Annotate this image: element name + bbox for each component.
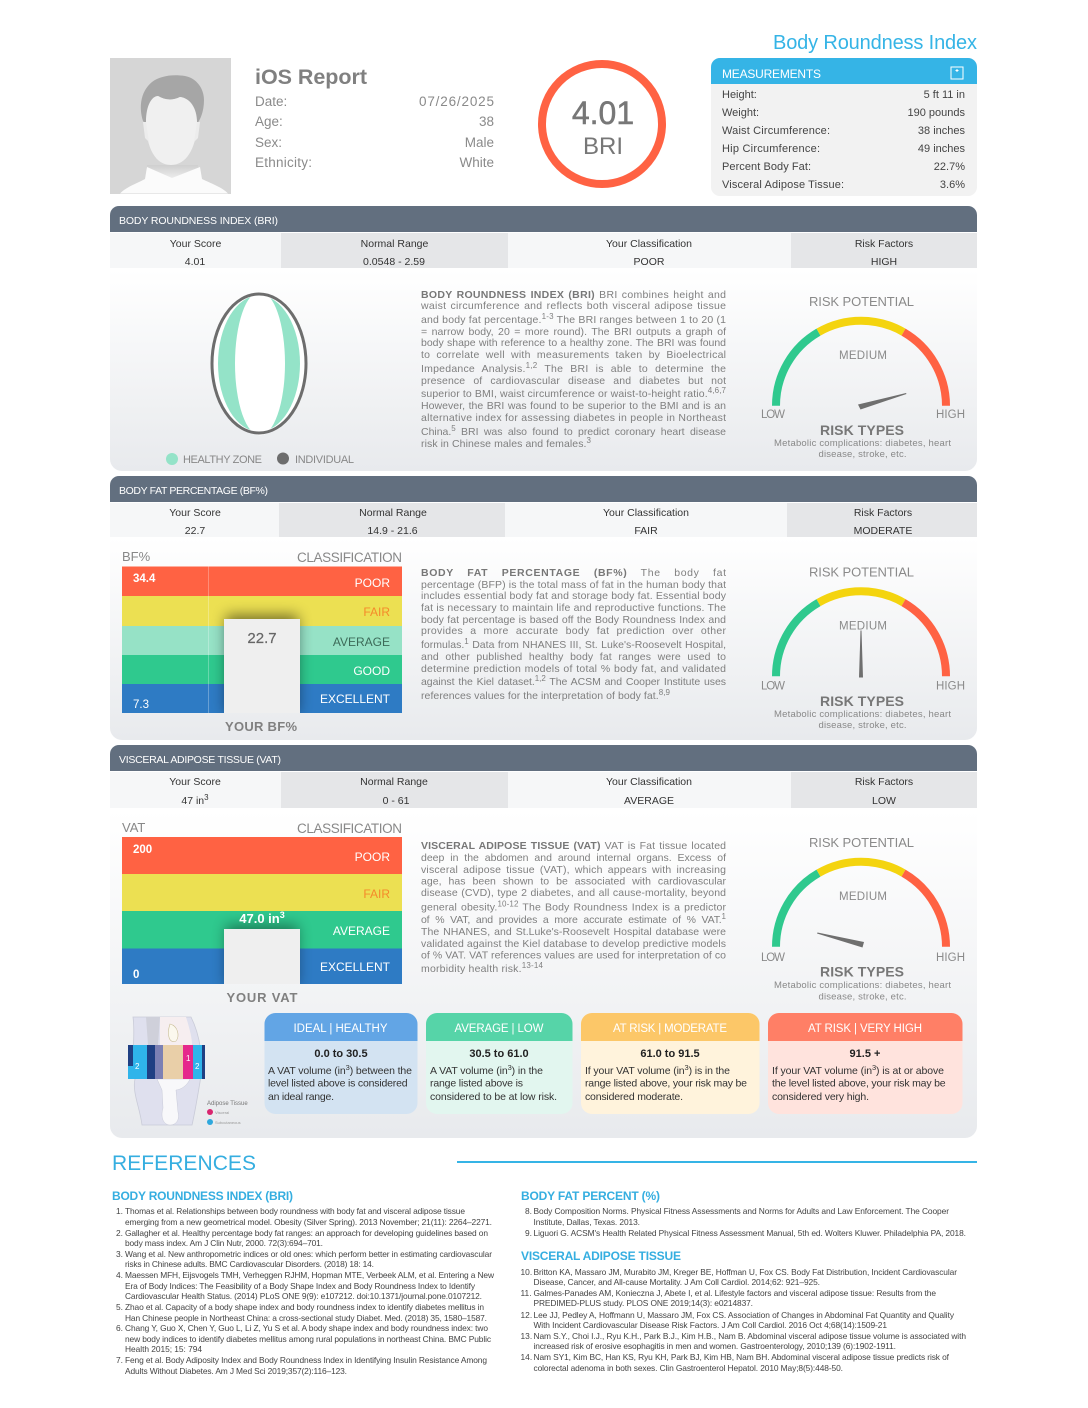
- chart: VAT classification bands: AVERAGE: [333, 924, 390, 938]
- chart: body fat classification bands: 7.3: [133, 699, 149, 711]
- chart: body fat classification bands: AVERAGE: [333, 635, 390, 649]
- card: at risk very high: 91.5 +: [850, 1048, 880, 1060]
- text: VAT description: [421, 840, 727, 975]
- panel: measurements: 49 inches: [918, 143, 965, 155]
- panel: measurements: Waist Circumference:: [722, 125, 830, 137]
- VAT score table: 3: [204, 793, 209, 802]
- card: ideal healthy: ) between the: [350, 1065, 412, 1077]
- text: BRI description: 1-3: [542, 312, 554, 321]
- text: BF description: percentage (BFP) is the total mass of fat in the human body that: [421, 579, 726, 591]
- BF score table: [110, 503, 977, 537]
- BRI score table: Your Score: [170, 238, 221, 250]
- references: body roundness index: new body indices to identify diabetes mellitus among rural populations in northeast China. BMC Public: [125, 1334, 491, 1344]
- card: at risk moderate: ) is in the: [689, 1065, 730, 1077]
- card: average low: 30.5 to 61.0: [469, 1048, 529, 1060]
- text: VAT description: The NHANES, and St.Luke's-Roosevelt Hospital database were: [421, 926, 726, 938]
- text: BRI description: to correlate well with measurements taken by Bioelectrical: [421, 349, 726, 361]
- references: visceral adipose tissue: PREDIMED-PLUS study. PLOS ONE 2019;14(3): e0214837.: [534, 1298, 753, 1308]
- references: body fat percent: [521, 1189, 966, 1238]
- text: BF description: BODY FAT PERCENTAGE (BF%) The body fat: [421, 567, 726, 579]
- BRI score ring: [542, 64, 662, 184]
- BRI score table: [110, 233, 977, 268]
- text: VAT description: VISCERAL ADIPOSE TISSUE (VAT) VAT is Fat tissue located: [421, 840, 726, 852]
- text: BF description: body fat percentage is based off the Body Roundness Index and: [421, 614, 726, 626]
- card: ideal healthy: 0.0 to 30.5: [314, 1048, 368, 1060]
- chart: body fat classification bands: EXCELLENT: [320, 692, 391, 706]
- needle: BF medium reading: [859, 630, 863, 678]
- illustration: abdomen adipose cross-section: [128, 1017, 248, 1125]
- BF score table: 14.9 - 21.6: [367, 525, 418, 537]
- panel: measurements: MEASUREMENTS: [722, 67, 821, 81]
- chart: VAT classification bands: POOR: [355, 850, 390, 864]
- text: VAT description: 1: [722, 912, 727, 921]
- references: body roundness index: 7.: [116, 1355, 123, 1365]
- VAT score table: LOW: [872, 795, 896, 807]
- references: visceral adipose tissue: 10.: [520, 1267, 532, 1277]
- text: VAT description: morbidity health risk.: [421, 963, 522, 975]
- card: average low: A VAT volume (in: [430, 1065, 508, 1077]
- references: visceral adipose tissue: With Incident Cardiovascular Disease Risk Factors. J Am Coll Cardiol. 2016 Oct 4;68(14):1509-21: [534, 1320, 887, 1330]
- panel: measurements: [711, 58, 977, 196]
- report heading: iOS Report: [255, 65, 367, 89]
- text: BRI description: = narrow body, 20 = more round). The BRI outputs a graph of: [421, 326, 726, 338]
- text: BRI description: 1,2: [526, 361, 538, 370]
- gauge: BRI risk potential: [761, 294, 965, 460]
- chart: body fat classification bands: GOOD: [353, 664, 390, 678]
- references: body roundness index: emerging from a new geometrical model. Obesity (Silver Spring). 2013 November; 21(11): 2264–2271.: [125, 1217, 492, 1227]
- BRI section header: BODY ROUNDNESS INDEX (BRI): [119, 215, 278, 227]
- references: body fat percent: 8.: [525, 1206, 532, 1216]
- gauge: BRI risk potential: RISK TYPES: [820, 422, 904, 438]
- gauge: BRI risk potential: HIGH: [936, 409, 965, 421]
- references: body roundness index: 1.: [116, 1206, 123, 1216]
- BF section header: BODY FAT PERCENTAGE (BF%): [119, 485, 268, 497]
- card: average low: [426, 1013, 572, 1114]
- card: ideal healthy: an ideal range.: [268, 1091, 334, 1103]
- references: body roundness index: [112, 1189, 495, 1376]
- patient details: [255, 94, 494, 170]
- needle: BRI high-medium reading: [858, 393, 906, 410]
- text: VAT description: 10-12: [497, 900, 519, 908]
- illustration: abdomen adipose cross-section: 2: [135, 1062, 140, 1071]
- patient details: Male: [465, 135, 494, 150]
- panel: measurements: 5 ft 11 in: [924, 89, 965, 101]
- card: average low: range listed above is: [430, 1078, 523, 1090]
- BRI score ring: BRI: [583, 133, 623, 160]
- card: at risk very high: [768, 1013, 962, 1114]
- text: BRI description: However, the BRI was found to be superior to the BMI and is an: [421, 400, 726, 412]
- text: BRI description: BODY ROUNDNESS INDEX (BRI) BRI combines height and: [421, 289, 726, 301]
- BF score table: Normal Range: [359, 507, 427, 519]
- gauge: BF risk potential: HIGH: [936, 680, 965, 692]
- card: ideal healthy: IDEAL | HEALTHY: [294, 1023, 388, 1035]
- VAT score table: 0 - 61: [383, 795, 410, 807]
- text: VAT description: deep in the abdomen and around internal organs. Excess of: [421, 852, 726, 864]
- card: average low: 3: [508, 1063, 512, 1072]
- chart: VAT classification bands: FAIR: [363, 887, 390, 901]
- BRI score table: 0.0548 - 2.59: [363, 256, 425, 268]
- BF score table: Your Classification: [603, 507, 689, 519]
- chart: body fat classification bands: 34.4: [133, 573, 156, 585]
- gauge: VAT risk potential: HIGH: [936, 952, 965, 964]
- illustration: abdomen adipose cross-section: Visceral: [215, 1110, 229, 1115]
- card: average low: considered to be at low risk.: [430, 1091, 557, 1103]
- BRI score table: Normal Range: [361, 238, 429, 250]
- references: visceral adipose tissue: Disease, Cancer, and All-cause Mortality. J Am Coll Cardiol. 2014;62: 921–925.: [534, 1277, 820, 1287]
- chart: body fat classification bands: CLASSIFICATION: [297, 550, 402, 565]
- VAT section header: VISCERAL ADIPOSE TISSUE (VAT): [119, 754, 281, 766]
- references: body roundness index: Era of Body Indices: The Feasibility of a Body Shape Index and Body Roundness Index to Identify: [125, 1281, 476, 1291]
- gauge: BF risk potential: disease, stroke, etc.: [818, 720, 906, 731]
- BRI score table: 4.01: [185, 256, 205, 268]
- panel: measurements: Weight:: [722, 107, 759, 119]
- BF score table: FAIR: [634, 525, 658, 537]
- text: BRI description: 5: [451, 424, 456, 433]
- references: visceral adipose tissue: Nam SY1, Kim BC, Han KS, Ryu KH, Park BJ, Kim HB, Nam BH. Abdominal visceral adipose tissue predicts risk of: [534, 1352, 950, 1362]
- text: BRI description: risk in Chinese males and females.: [421, 438, 586, 450]
- card: ideal healthy: level listed above is considered: [268, 1078, 408, 1090]
- panel: measurements: Hip Circumference:: [722, 143, 820, 155]
- gauge: BRI risk potential: MEDIUM: [839, 350, 887, 362]
- references: visceral adipose tissue: VISCERAL ADIPOSE TISSUE: [521, 1249, 681, 1263]
- chart: VAT classification bands: EXCELLENT: [320, 960, 391, 974]
- gauge: VAT risk potential: Metabolic complications: diabetes, heart: [774, 980, 951, 991]
- references: visceral adipose tissue: Lee JJ, Pedley A, Hoffmann U, Massaro JM, Fox CS. Association of Changes in Abdominal Fat Quantity and Quality: [534, 1310, 955, 1320]
- BF score table: 22.7: [185, 525, 205, 537]
- text: BRI description: presence of cardiovascular disease and diabetes but not: [421, 375, 726, 387]
- card: at risk very high: AT RISK | VERY HIGH: [808, 1023, 922, 1035]
- chart: body fat classification bands: POOR: [355, 576, 390, 590]
- chart: body shape ellipse: [212, 292, 306, 436]
- gauge: VAT risk potential: LOW: [761, 952, 785, 964]
- panel: BRI section body: [110, 270, 977, 471]
- VAT section header: [110, 745, 977, 771]
- card: average low: ) in the: [512, 1065, 543, 1077]
- text: BF description: determine prediction models of total % body fat, and validated: [421, 663, 726, 675]
- gauge: BF risk potential: Metabolic complications: diabetes, heart: [774, 709, 951, 720]
- references: body fat percent: BODY FAT PERCENT (%): [521, 1189, 660, 1203]
- card: ideal healthy: A VAT volume (in: [268, 1065, 346, 1077]
- text: BF description: provides a more accurate body fat prediction over other: [421, 625, 726, 637]
- chart: VAT classification bands: 200: [133, 844, 152, 856]
- text: VAT description: of % VAT. VAT references values are used for interpretation of co: [421, 950, 726, 962]
- card: at risk very high: 3: [872, 1063, 876, 1072]
- patient details: 07/26/2025: [419, 94, 494, 109]
- gauge: VAT risk potential: disease, stroke, etc.: [818, 992, 906, 1002]
- text: BRI description: superior to BMI, waist circumference or waist-to-height ratio.: [421, 388, 708, 400]
- BF score table: Risk Factors: [854, 507, 912, 519]
- card: average low: AVERAGE | LOW: [454, 1023, 544, 1035]
- patient details: Date:: [255, 94, 287, 109]
- patient details: 38: [479, 114, 494, 129]
- card: at risk moderate: 61.0 to 91.5: [640, 1048, 700, 1060]
- text: VAT description: The Body Roundness Index is a predictor: [519, 902, 726, 914]
- references: body roundness index: Gallagher et al. Healthy percentage body fat ranges: an approach for developing guidelines based on: [125, 1228, 488, 1238]
- references: body roundness index: 3.: [116, 1249, 123, 1259]
- chart: VAT classification bands: 3: [280, 910, 285, 920]
- card: ideal healthy: 3: [346, 1063, 350, 1072]
- chart: body fat classification bands: YOUR BF%: [225, 719, 297, 734]
- panel: measurements: Height:: [722, 89, 757, 101]
- gauge: BRI risk potential: RISK POTENTIAL: [809, 294, 914, 309]
- illustration: abdomen adipose cross-section: 1: [186, 1054, 191, 1063]
- references: visceral adipose tissue: increased risk of erosive esophagitis in men and women. Gastroenterology, 2010;139 (6):1902-1911.: [534, 1341, 896, 1351]
- references: body roundness index: Cardiovascular Health Status. (2014) PLoS ONE 9(9): e107212. doi:10.1371/journal.pone.0107212.: [125, 1291, 482, 1301]
- illustration: abdomen adipose cross-section: Adipose Tissue: [207, 1101, 248, 1107]
- references: body roundness index: BODY ROUNDNESS INDEX (BRI): [112, 1189, 293, 1203]
- text: BF description: Data from NHANES III, St. Luke's-Roosevelt Hospital,: [469, 639, 726, 651]
- gauge: BF risk potential: LOW: [761, 680, 785, 692]
- card: at risk very high: ) is at or above: [876, 1065, 944, 1077]
- BF score table: Your Score: [169, 507, 221, 519]
- card: at risk very high: considered very high.: [772, 1091, 869, 1103]
- chart: VAT classification bands: YOUR VAT: [226, 990, 298, 1005]
- gauge: VAT risk potential: RISK TYPES: [820, 964, 904, 980]
- references: body roundness index: 2.: [116, 1228, 123, 1238]
- text: BRI description: 3: [587, 436, 592, 445]
- references: body roundness index: Maessen MFH, Eijsvogels TMH, Verheggen RJHM, Hopman MTE, Verbeek ALM, et al. Entering a New: [125, 1270, 495, 1280]
- VAT score table: Your Score: [169, 776, 221, 788]
- card: at risk very high: the level listed above, your risk may be: [772, 1078, 946, 1090]
- title: Body Roundness Index: [773, 32, 977, 54]
- references: body roundness index: Han Chinese people in Northeast China: a cross-sectional study Diabet. Med. (2018) 35, 1580–1587.: [125, 1313, 487, 1323]
- illustration: abdomen adipose cross-section: Subcutaneous: [215, 1120, 241, 1125]
- text: BRI description: and body fat percentage.: [421, 314, 541, 326]
- illustration: abdomen adipose cross-section: 2: [195, 1062, 200, 1071]
- references: body roundness index: 6.: [116, 1323, 123, 1333]
- text: BF description: 1,2: [535, 674, 546, 683]
- panel: measurements: 190 pounds: [908, 107, 965, 119]
- chart: body fat classification bands: 22.7: [247, 630, 277, 647]
- text: VAT description: validated against the Kiel database to develop predictive models: [421, 938, 726, 950]
- text: BRI description: body shape with reference to a healthy zone. The BRI was found: [421, 337, 726, 349]
- needle: VAT low-medium reading: [817, 932, 864, 948]
- BRI score ring: 4.01: [572, 95, 634, 131]
- text: BRI description: 4,6,7: [708, 386, 727, 395]
- text: BF description: references values for the interpretation of body fat.: [421, 690, 659, 702]
- references: body roundness index: Chang Y, Guo X, Chen Y, Guo L, Li Z, Yu S et al. A body shape index and body roundness index: two: [125, 1323, 488, 1333]
- text: BRI description: The BRI is able to determine the: [537, 363, 726, 375]
- references: body roundness index: 5.: [116, 1302, 123, 1312]
- chart: VAT classification bands: [122, 820, 402, 1005]
- card: at risk moderate: If your VAT volume (in: [585, 1065, 685, 1077]
- references: visceral adipose tissue: 13.: [520, 1331, 532, 1341]
- text: VAT description: general obesity.: [421, 902, 497, 914]
- references: body roundness index: Feng et al. Body Adiposity Index and Body Roundness Index in Identifying Insulin Resistance Among: [125, 1355, 487, 1365]
- panel: measurements: Visceral Adipose Tissue:: [722, 179, 844, 191]
- chart: VAT classification bands: 0: [133, 969, 139, 981]
- gauge: BF risk potential: RISK POTENTIAL: [809, 564, 914, 580]
- references: visceral adipose tissue: Britton KA, Massaro JM, Murabito JM, Kreger BE, Hoffman U, Fox CS. Body Fat Distribution, Incident Cardiovascular: [534, 1267, 957, 1277]
- text: BRI description: alternative index for assessing diabetes in people in Northeast: [421, 412, 726, 424]
- VAT score table: AVERAGE: [624, 795, 674, 807]
- references: visceral adipose tissue: 12.: [520, 1310, 532, 1320]
- text: BF description: against the Kiel dataset.: [421, 676, 535, 688]
- text: BF description: and other published healthy body fat ranges were used to: [421, 651, 726, 663]
- VAT score table: Normal Range: [360, 776, 428, 788]
- text: VAT description: age, has been shown to be associated with cardiovascular: [421, 876, 726, 888]
- BRI score table: Risk Factors: [855, 238, 913, 250]
- text: BF description: formulas.: [421, 639, 464, 651]
- chart: body fat classification bands: BF%: [122, 549, 151, 564]
- text: VAT description: 13-14: [522, 961, 544, 970]
- patient details: White: [459, 155, 494, 170]
- references: body roundness index: body mass index. Am J Clin Nutr, 2000. 72(3):694–701.: [125, 1238, 323, 1248]
- BRI section header: [110, 206, 977, 232]
- panel: BF section body: [110, 538, 977, 740]
- text: BRI description: BRI was also found to predict coronary heart disease: [456, 426, 726, 438]
- BF score table: MODERATE: [854, 525, 912, 537]
- BRI score table: POOR: [634, 256, 665, 268]
- text: BRI description: The BRI ranges between 1 to 20 (1: [554, 314, 726, 326]
- gauge: VAT risk potential: RISK POTENTIAL: [809, 835, 914, 850]
- legend: body shape: HEALTHY ZONE: [183, 454, 262, 466]
- text: BF description: includes essential body fat and storage body fat. Essential body: [421, 590, 727, 602]
- gauge: VAT risk potential: [761, 835, 965, 1002]
- references: body roundness index: risks in Chinese adults. BMC Cardiovascular Disorders. (2018) 18: 14.: [125, 1259, 374, 1269]
- text: BRI description: China.: [421, 426, 451, 438]
- BRI score table: Your Classification: [606, 238, 692, 250]
- references: visceral adipose tissue: colorectal adenoma in both sexes. Clin Gastroenterol Hepatol. 2010 May;8(5):448-50.: [534, 1363, 843, 1373]
- gauge: BRI risk potential: Metabolic complications: diabetes, heart: [774, 438, 951, 449]
- panel: measurements: 22.7%: [934, 161, 965, 173]
- references: body roundness index: Health 2015; 15: 794: [125, 1344, 202, 1354]
- references: body fat percent: Body Composition Norms. Physical Fitness Assessments and Norms for Adults and Law Enforcement. The Cooper: [534, 1206, 949, 1216]
- VAT score table: 47 in: [181, 795, 204, 807]
- legend: body shape: INDIVIDUAL: [295, 454, 354, 466]
- panel: VAT section body: [110, 810, 977, 1138]
- card: at risk moderate: AT RISK | MODERATE: [613, 1023, 727, 1035]
- references: body roundness index: Zhao et al. Capacity of a body shape index and body roundness index to identify diabetes mellitus in: [125, 1302, 484, 1312]
- references: body roundness index: Thomas et al. Relationships between body roundness with body fat and visceral adipose tissue: [125, 1206, 465, 1216]
- text: BRI description: Impedance Analysis.: [421, 363, 525, 375]
- text: BF description: 1: [464, 637, 469, 646]
- gauge: BF risk potential: MEDIUM: [839, 620, 887, 632]
- VAT score table: Your Classification: [606, 776, 692, 788]
- gauge: BRI risk potential: LOW: [761, 409, 785, 421]
- chart: VAT classification bands: CLASSIFICATION: [297, 821, 402, 836]
- patient details: Age:: [255, 114, 283, 129]
- card: ideal healthy: [264, 1013, 418, 1114]
- VAT score table: [110, 772, 977, 808]
- chart: body fat classification bands: [122, 549, 402, 734]
- patient details: Sex:: [255, 135, 282, 150]
- references: visceral adipose tissue: [520, 1249, 966, 1373]
- chart: VAT classification bands: 47.0 in: [239, 911, 280, 926]
- text: BF description: 8,9: [659, 688, 671, 697]
- text: BF description: fat is necessary to maintain life and reproductive functions. The: [421, 602, 726, 614]
- gauge: BRI risk potential: disease, stroke, etc.: [818, 449, 906, 460]
- text: VAT description: visceral adipose tissue (VAT), which appears with increasing: [421, 864, 726, 876]
- text: BF description: [421, 567, 727, 702]
- gauge: VAT risk potential: MEDIUM: [839, 891, 887, 903]
- references: body fat percent: Liguori G. ACSM's Health Related Physical Fitness Assessment Manual, 5th ed. Wolters Kluwer. Philadelphia PA, 2018.: [534, 1228, 966, 1238]
- patient details: Ethnicity:: [255, 155, 312, 170]
- card: at risk moderate: considered moderate.: [585, 1091, 683, 1103]
- BF section header: [110, 476, 977, 502]
- references heading: REFERENCES: [112, 1152, 256, 1175]
- panel: measurements: 38 inches: [918, 125, 965, 137]
- gauge: BF risk potential: RISK TYPES: [820, 693, 904, 709]
- BRI score table: HIGH: [871, 256, 897, 268]
- references: visceral adipose tissue: Nam S.Y., Choi I.J., Ryu K.H., Park B.J., Kim H.B., Nam B. Abdominal visceral adipose tissue volume is associated with: [534, 1331, 966, 1341]
- gauge: BF risk potential: [761, 564, 965, 731]
- references: visceral adipose tissue: Galmes-Panades AM, Konieczna J, Abete I, et al. Lifestyle factors and visceral adipose tissue: Results from the: [534, 1288, 936, 1298]
- references: body fat percent: Institute, Dallas, Texas. 2013.: [534, 1217, 640, 1227]
- references: body roundness index: Adults Without Diabetes. Am J Med Sci 2019;357(2):116–123.: [125, 1366, 347, 1376]
- profile photo placeholder: [110, 58, 231, 194]
- panel: measurements: Percent Body Fat:: [722, 161, 811, 173]
- references: visceral adipose tissue: 14.: [520, 1352, 532, 1362]
- references: visceral adipose tissue: 11.: [520, 1288, 532, 1298]
- text: BRI description: [420, 289, 727, 450]
- card: at risk moderate: range listed above, your risk may be: [585, 1078, 747, 1090]
- references: body fat percent: 9.: [525, 1228, 532, 1238]
- text: VAT description: disease (CVD), type 2 diabetes, and all cause-mortality, beyond: [421, 887, 726, 899]
- VAT score table: Risk Factors: [855, 776, 913, 788]
- card: at risk very high: If your VAT volume (in: [772, 1065, 872, 1077]
- references: body roundness index: 4.: [116, 1270, 123, 1280]
- card: at risk moderate: [581, 1013, 760, 1114]
- legend: body shape: [166, 452, 354, 466]
- chart: body fat classification bands: FAIR: [363, 605, 390, 619]
- card: at risk moderate: 3: [685, 1063, 689, 1072]
- references: body roundness index: Wang et al. New anthropometric indices or old ones: which perform better in estimating cardiovascular: [125, 1249, 492, 1259]
- panel: measurements: 3.6%: [940, 179, 965, 191]
- chart: VAT classification bands: VAT: [122, 820, 145, 835]
- text: BF description: The ACSM and Cooper Institute uses: [546, 676, 726, 688]
- text: BRI description: waist circumference and reflects both visceral adipose tissue: [420, 300, 726, 312]
- text: VAT description: of % VAT, and provides a more accurate estimate of % VAT.: [421, 914, 722, 926]
